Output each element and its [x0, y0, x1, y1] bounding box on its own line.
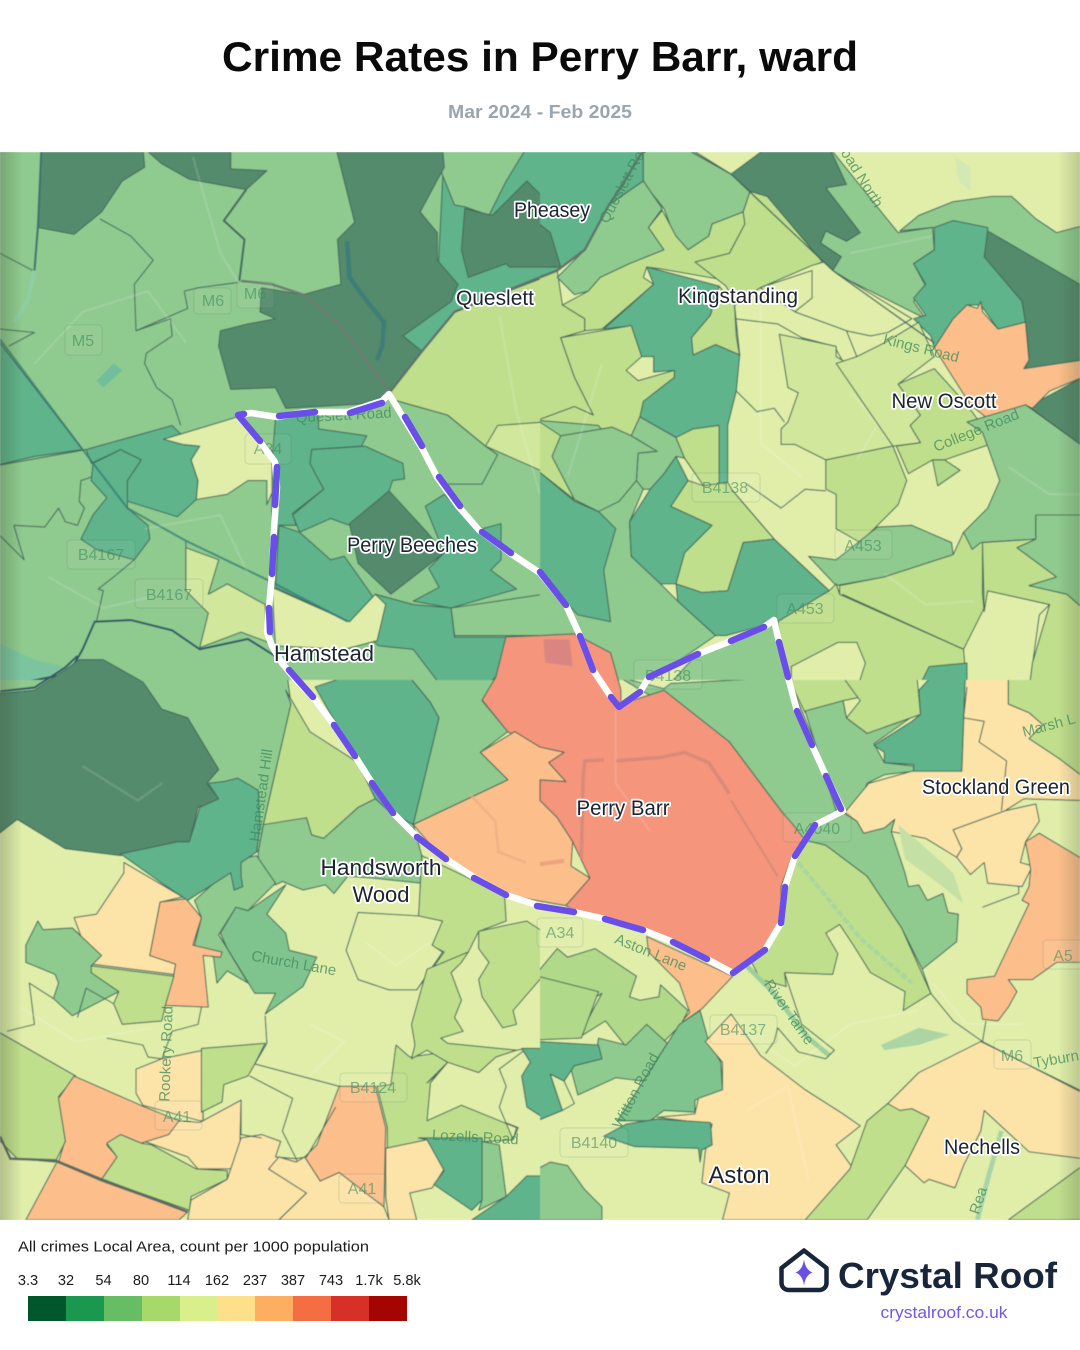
road number shields: B4138 [702, 480, 748, 497]
road number shields: A453 [844, 538, 882, 555]
road number shields: B4140 [571, 1135, 617, 1152]
road number shields: A41 [348, 1181, 376, 1198]
road number shields: M6 [202, 293, 224, 310]
road and river names: Marsh L [1020, 710, 1077, 741]
road and river names: Lozells Road [431, 1127, 519, 1148]
place names: Handsworth [320, 855, 442, 880]
road and river names: Hamstead Hill [247, 748, 276, 843]
road number shields: A453 [786, 601, 824, 618]
website url: crystalroof.co.uk [880, 1304, 1008, 1322]
road number shields: M5 [72, 333, 94, 350]
place names: Aston [708, 1162, 770, 1189]
road and river names: Tyburn [1032, 1047, 1080, 1072]
legend scale labels: 114 [167, 1273, 191, 1289]
legend title: All crimes Local Area, count per 1000 population [18, 1240, 369, 1256]
road number shields: A5 [1053, 948, 1073, 965]
place names: New Oscott [892, 390, 997, 413]
icon: Crystal Roof house logo [782, 1250, 826, 1290]
subtitle: date range: Mar 2024 - Feb 2025 [448, 101, 632, 122]
road number shields: A34 [254, 441, 282, 458]
legend scale labels: 387 [281, 1273, 305, 1289]
place names: Perry Barr [576, 797, 670, 820]
road and river names: River Tame [760, 977, 817, 1048]
Perry Barr red and orange areas [413, 634, 805, 973]
road number shields: M6 [244, 286, 266, 303]
road number shields: A4040 [794, 821, 840, 838]
title: Crime Rates in Perry Barr, ward [222, 33, 858, 80]
legend scale labels: 3.3 [18, 1273, 38, 1289]
logo wordmark: Crystal Roof [838, 1255, 1058, 1296]
legend colour bar [28, 1296, 407, 1321]
map areas: north-west [0, 152, 541, 681]
road and river names: Witton Road [609, 1050, 663, 1131]
place names: Queslett [456, 287, 534, 310]
map areas: south-east [537, 677, 1080, 1231]
place names: Nechells [944, 1136, 1020, 1159]
place names: Wood [352, 882, 410, 907]
legend scale labels: 54 [95, 1273, 112, 1289]
legend scale labels [18, 1273, 421, 1289]
place names: Pheasey [514, 199, 590, 222]
legend scale labels: 32 [58, 1273, 74, 1289]
road and river names: Aston Lane [612, 931, 689, 975]
place names: Stockland Green [922, 776, 1070, 799]
road number shields: B4124 [350, 1080, 396, 1097]
road number shields: M6 [1001, 1048, 1023, 1065]
legend scale labels: 743 [319, 1273, 343, 1289]
ward boundary: Perry Barr [238, 394, 843, 973]
place names: Hamstead [274, 641, 374, 666]
place names: Perry Beeches [347, 534, 477, 557]
road number shields: B4137 [720, 1022, 766, 1039]
road and river names: Rookery Road [156, 1006, 177, 1102]
road and river names: College Road [931, 406, 1022, 456]
place names: Kingstanding [678, 285, 798, 308]
road number shields: B4138 [645, 668, 691, 685]
road number shields [65, 282, 1080, 1203]
edge vignette right [1058, 152, 1080, 1220]
road and river names: Road North [831, 137, 886, 211]
place names [274, 199, 1070, 1189]
legend scale labels: 5.8k [393, 1273, 421, 1289]
road and river names: Church Lane [250, 948, 338, 979]
road number shields: A34 [546, 925, 574, 942]
road and river names: Queslett Road [596, 134, 656, 226]
map areas: north-east [537, 147, 1080, 701]
legend scale labels: 162 [205, 1273, 229, 1289]
road and river names: Queslett Road [295, 405, 392, 427]
legend scale labels: 80 [133, 1273, 149, 1289]
road number shields: B4167 [146, 587, 192, 604]
legend scale labels: 237 [243, 1273, 267, 1289]
map areas: south-west [0, 677, 543, 1231]
road and river names [156, 134, 1080, 1216]
road and river names: Kings Road [881, 331, 961, 366]
edge vignette left [0, 152, 22, 1220]
road number shields: A41 [163, 1109, 191, 1126]
dark area crossing the south-west seam [0, 656, 260, 900]
road and river names: Rea [966, 1184, 991, 1216]
legend scale labels: 1.7k [355, 1273, 383, 1289]
road number shields: B4167 [78, 547, 124, 564]
